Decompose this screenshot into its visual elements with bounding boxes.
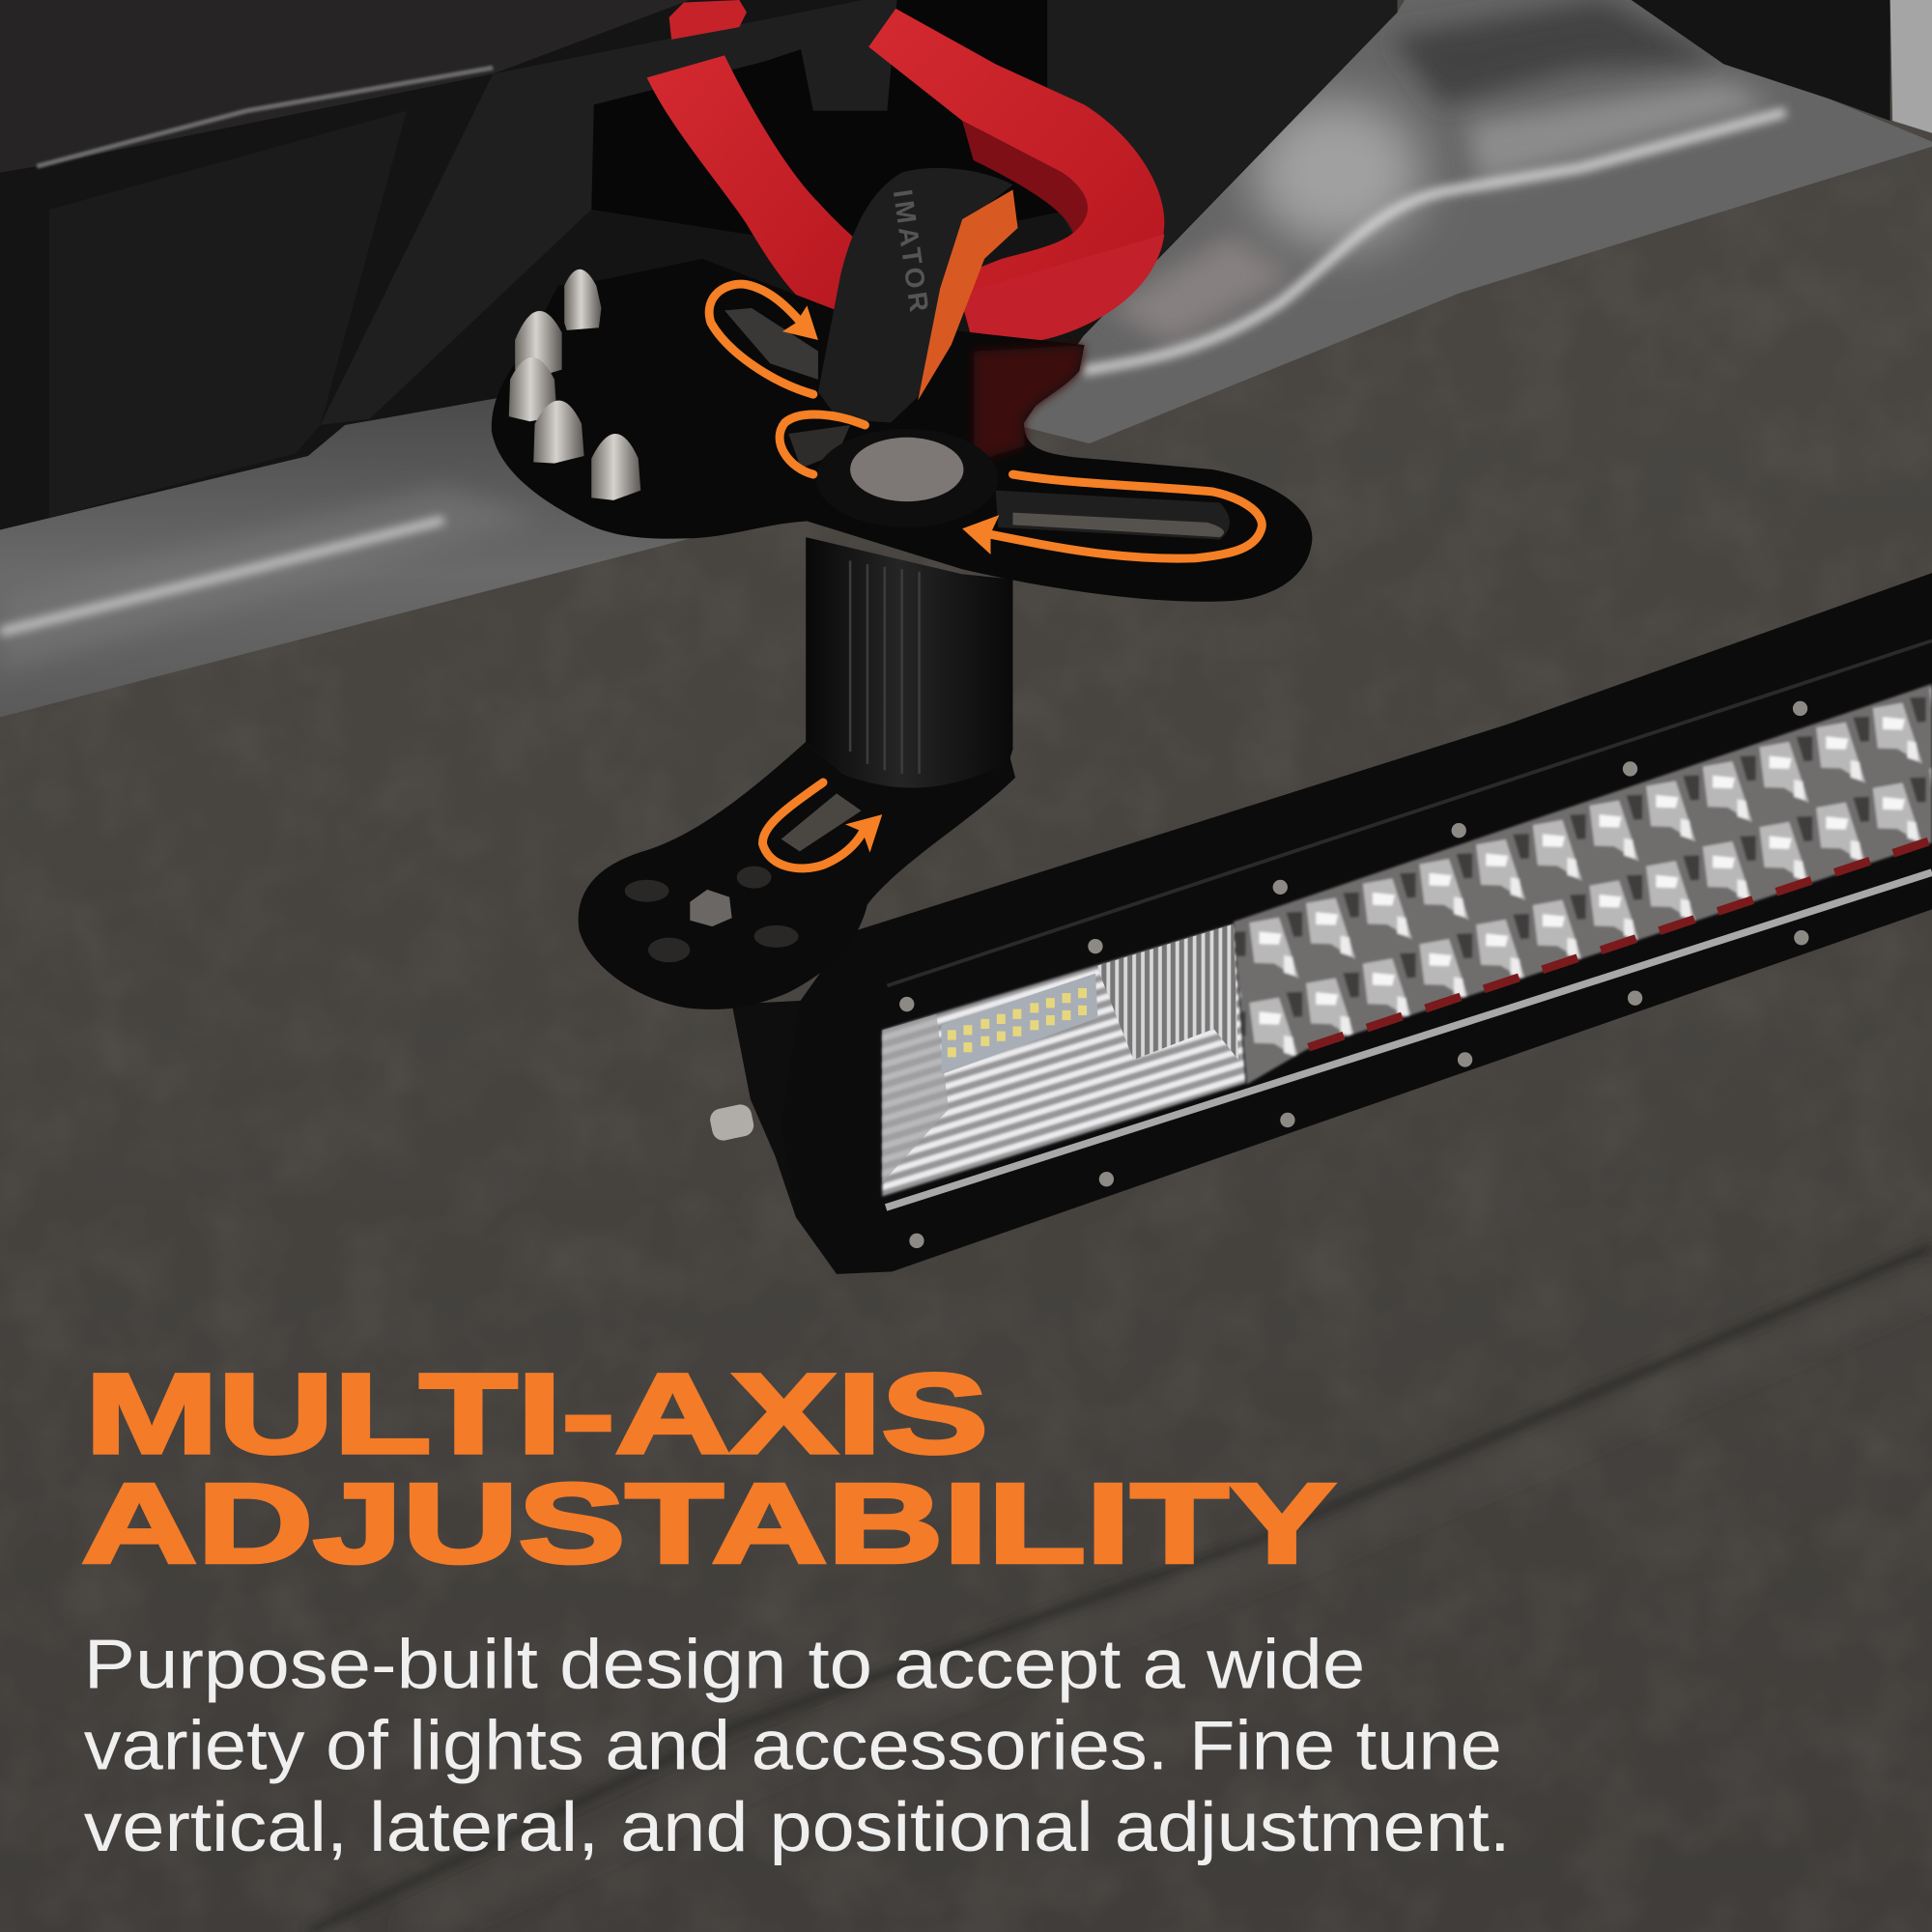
right slot floor gap	[1012, 513, 1224, 537]
tow opening	[591, 0, 1072, 252]
arrowheads	[782, 305, 999, 853]
lower trim strip	[886, 872, 1932, 1208]
lower plate holes	[625, 867, 799, 962]
heading line 1: MULTI-AXIS	[85, 1350, 988, 1477]
shackle top fragment	[669, 0, 747, 40]
body text	[84, 1625, 1511, 1866]
floor crack	[308, 1247, 1932, 1932]
flood chip panel	[941, 974, 1097, 1074]
lower bracket plate	[579, 742, 1015, 1009]
truck upper right corner	[1632, 0, 1890, 121]
acorn nuts on plate	[509, 270, 640, 500]
flood chips	[948, 988, 1087, 1057]
body line 1: Purpose-built design to accept a wide	[84, 1625, 1365, 1703]
lower slot	[781, 793, 862, 851]
housing groove	[887, 640, 1932, 985]
LED lens strip	[1234, 684, 1932, 1084]
upper slot	[724, 308, 818, 380]
bumper left highlight	[0, 520, 443, 632]
lower left body panel	[49, 111, 407, 518]
vertical post	[806, 537, 1012, 788]
silver bumper left	[0, 397, 813, 717]
center bracket plate	[321, 0, 1023, 425]
flood lens left reflector	[882, 1014, 949, 1182]
right slot	[996, 491, 1230, 540]
flood lens	[882, 924, 1246, 1197]
silver bumper right	[1021, 0, 1932, 443]
red reflector strip	[1309, 840, 1932, 1047]
light bar housing	[781, 573, 1932, 1274]
mount knob	[708, 1102, 755, 1143]
arrow: middle slot	[780, 414, 865, 474]
red d-ring shackle	[647, 0, 1164, 346]
upper body panel	[0, 0, 690, 173]
body line 2: variety of lights and accessories. Fine tune	[84, 1707, 1502, 1785]
light bar side mount	[732, 1001, 804, 1217]
strap loop	[818, 168, 1012, 423]
shackle lower side	[962, 234, 1164, 346]
pivot washer	[815, 429, 998, 527]
bar screws	[899, 701, 1808, 1248]
adjustment arrows	[709, 284, 1262, 868]
shackle right leg	[868, 9, 1164, 346]
flood lens upper reflector	[1096, 924, 1238, 1060]
shackle left leg	[647, 55, 887, 332]
middle slot	[788, 425, 850, 469]
plate corner	[1890, 0, 1932, 133]
heading	[81, 1350, 1336, 1586]
arrow: lower slot	[762, 782, 864, 868]
body line 3: vertical, lateral, and positional adjustment.	[84, 1788, 1511, 1866]
lower plate bolt	[690, 890, 732, 926]
pivot bolt head	[850, 438, 963, 501]
heading line 2: ADJUSTABILITY	[81, 1460, 1336, 1586]
arrow: right slot	[985, 474, 1262, 558]
bumper left glow	[0, 487, 542, 671]
red plate reflection	[974, 345, 1084, 462]
arrow: upper slot	[709, 284, 813, 394]
strap lettering: IMATOR	[888, 187, 935, 317]
bracket upper plate	[492, 259, 1312, 602]
body panel right	[1035, 0, 1397, 308]
orange shackle pin	[918, 189, 1018, 401]
shackle dark inner	[962, 121, 1088, 233]
dark truck body	[0, 0, 1397, 529]
post ribs	[850, 560, 920, 774]
panel edge highlight	[37, 68, 493, 166]
